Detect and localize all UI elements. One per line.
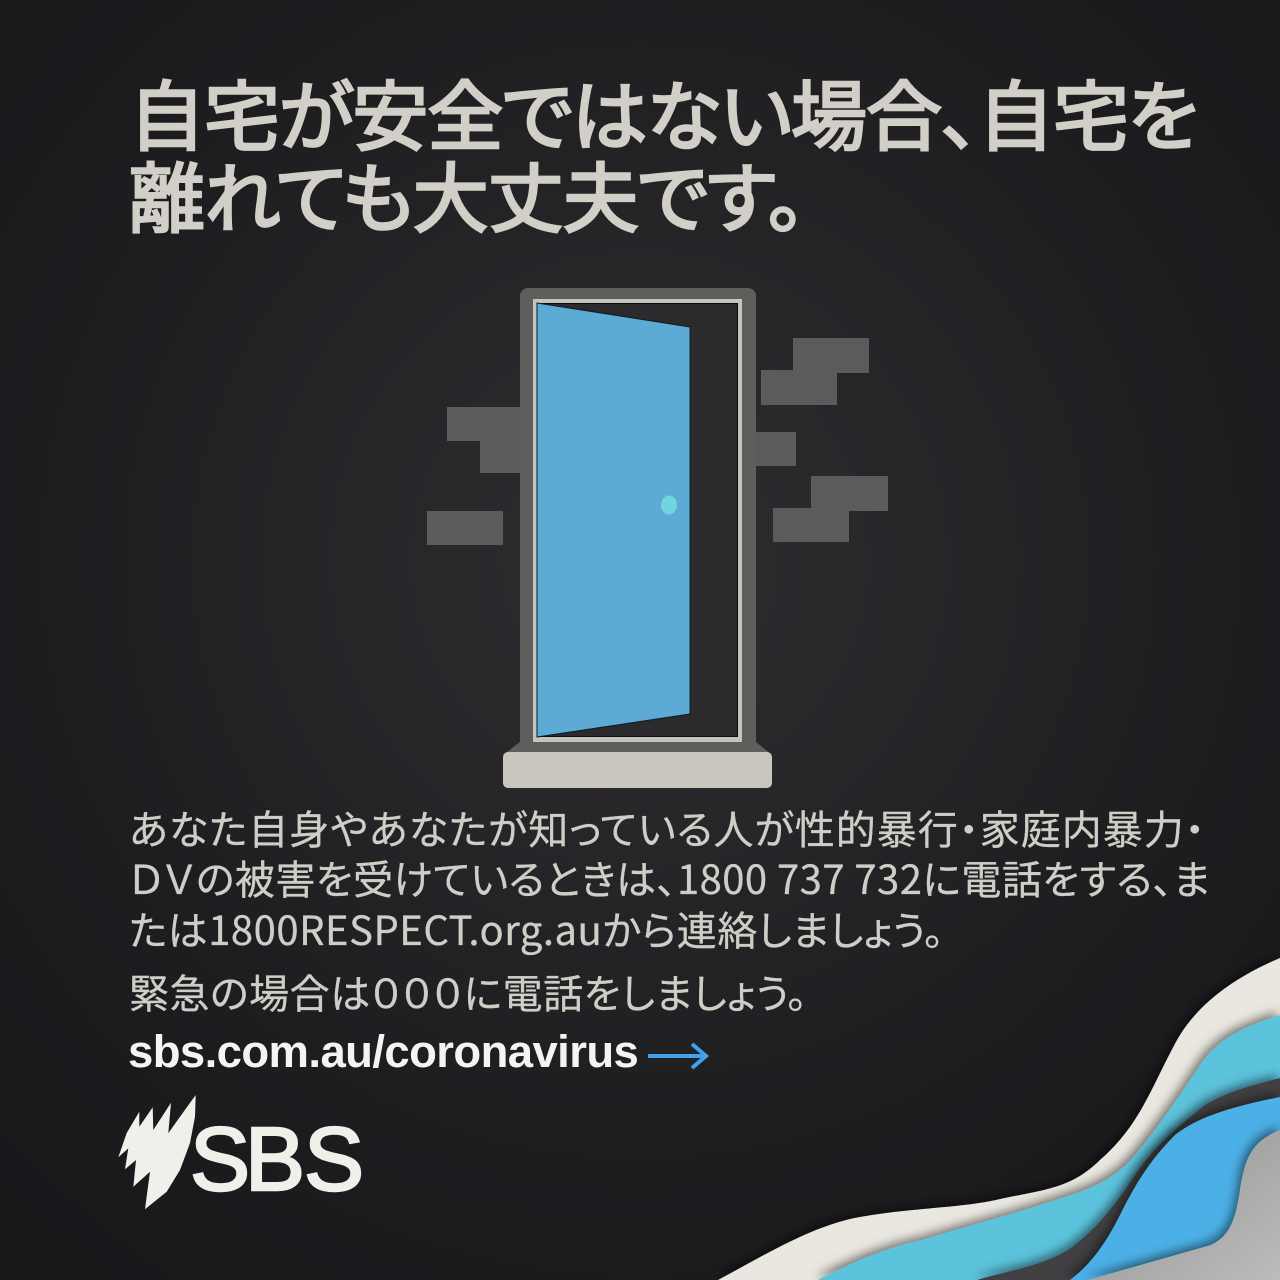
door leaf: [537, 303, 690, 737]
title: 離れても大丈夫です。: [129, 138, 804, 248]
icon: open door with brick wall: [427, 288, 888, 788]
title: [129, 56, 1197, 248]
door step: [503, 752, 772, 788]
door frame: [503, 288, 772, 755]
body text: [129, 798, 1210, 957]
door knob: [661, 496, 677, 514]
body text: たは1800RESPECT.org.auから連絡しましょう。: [129, 899, 944, 957]
logo mark: [118, 1095, 196, 1209]
title: 自宅が安全ではない場合、自宅を: [129, 56, 1197, 166]
arrow: [648, 1044, 706, 1068]
body text: ＤＶの被害を受けているときは、1800 737 732に電話をする、ま: [129, 848, 1210, 906]
body text: あなた自身やあなたが知っている人が性的暴行・家庭内暴力・: [129, 798, 1206, 856]
logo: SBS: [118, 1095, 364, 1210]
website link: sbs.com.au/coronavirus: [128, 1026, 638, 1077]
emergency text: 緊急の場合は０００に電話をしましょう。: [129, 962, 808, 1020]
logo wordmark: SBS: [190, 1110, 364, 1210]
bricks: [427, 338, 888, 545]
paper waves: [718, 958, 1280, 1280]
